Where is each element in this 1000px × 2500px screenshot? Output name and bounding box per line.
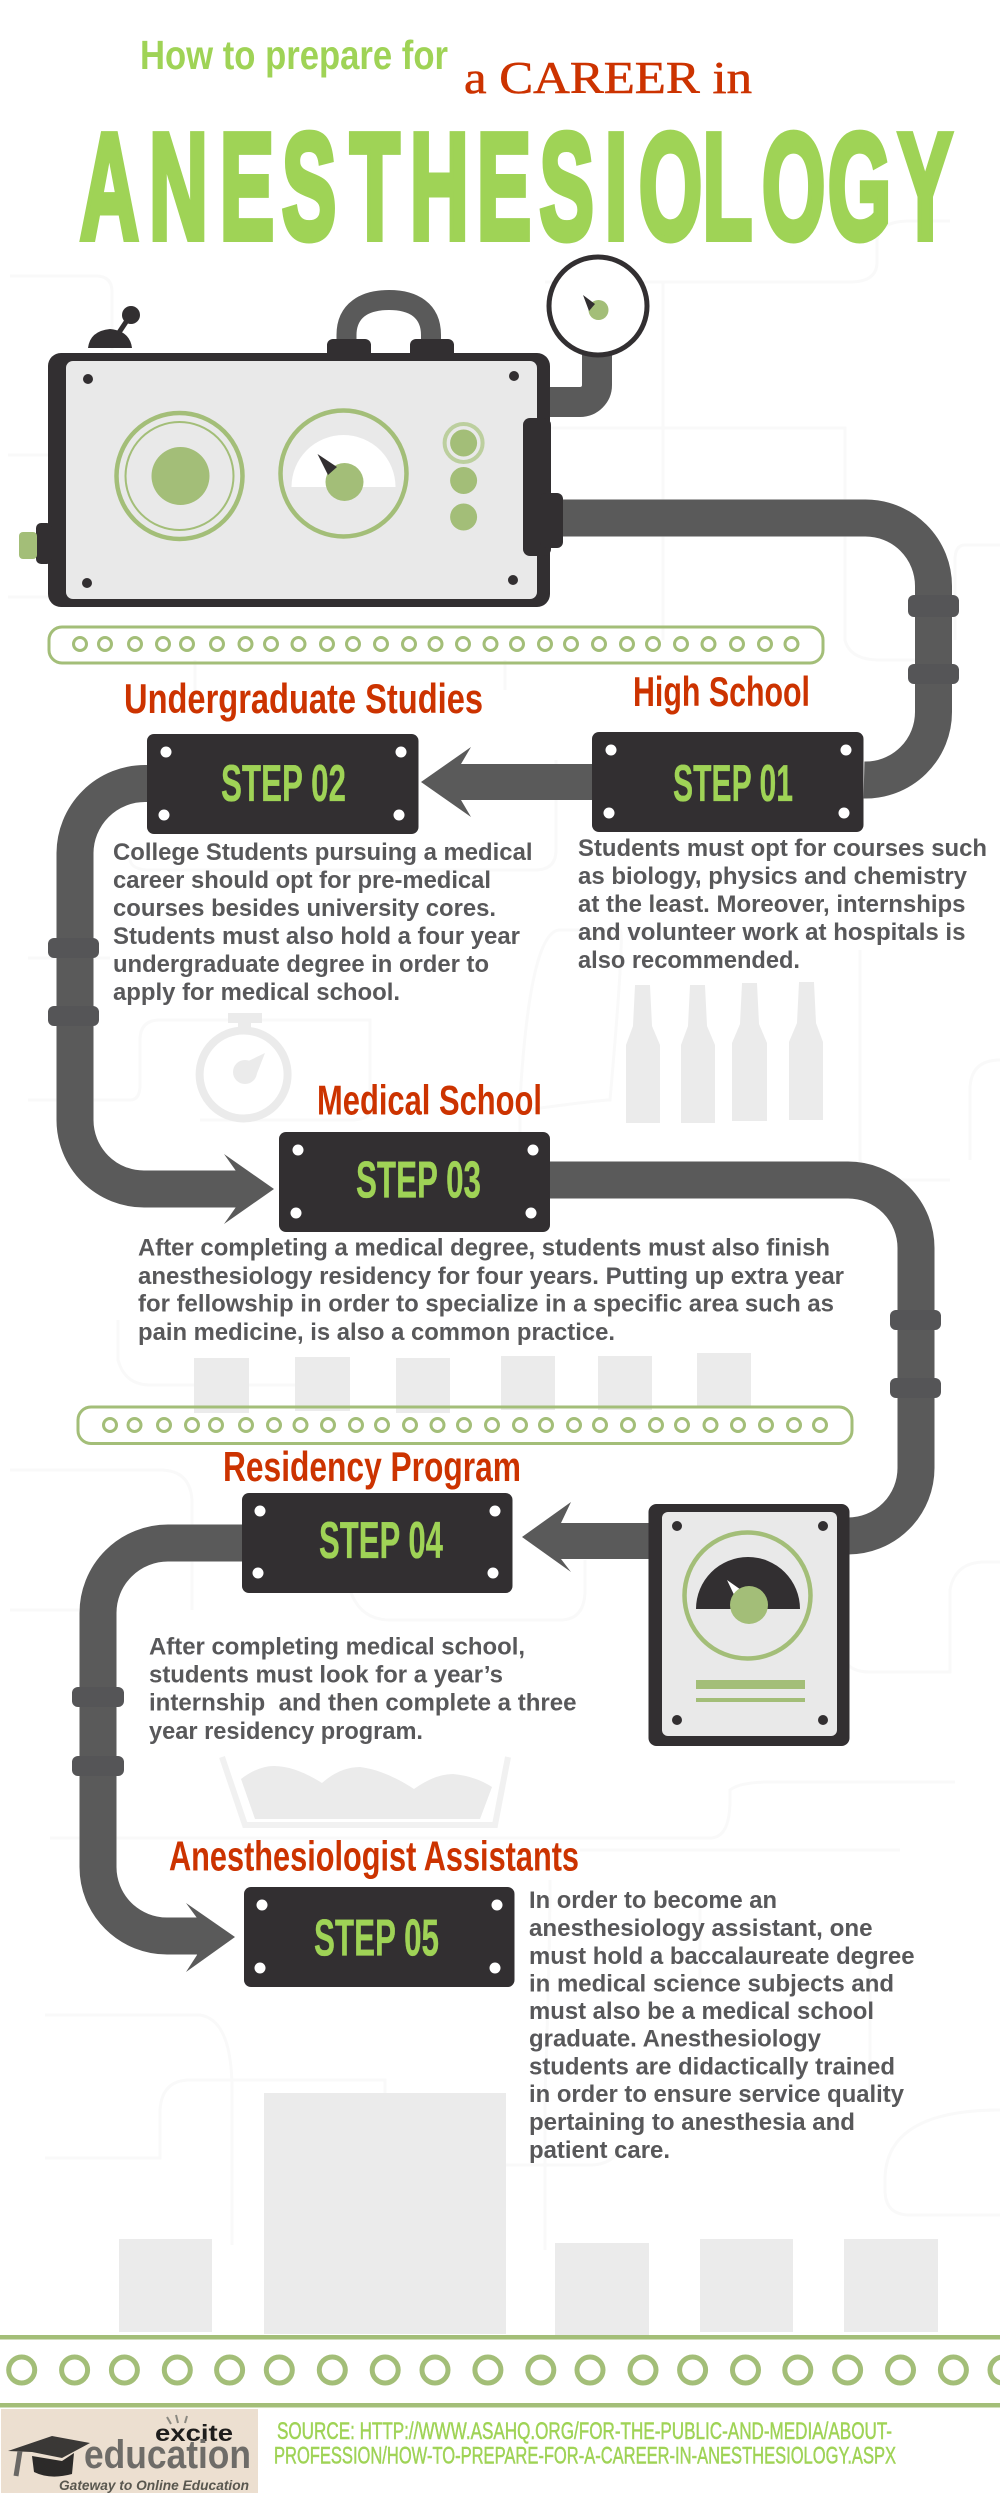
title line: a career in: a CAREER in <box>464 52 752 103</box>
plate: step 05 <box>244 1887 514 1987</box>
pipe: machine to step 01 <box>550 518 959 780</box>
text: step 05 description <box>529 1887 914 2164</box>
text: step 04 description: internship and then complete a three <box>149 1690 576 1716</box>
plate: step 03: STEP 03 <box>356 1152 481 1210</box>
step 04 group <box>149 1443 576 1745</box>
logo word: education: education <box>84 2433 251 2477</box>
machine panel <box>66 361 537 599</box>
machine <box>19 257 647 607</box>
machine screws <box>82 371 519 588</box>
plate: step 01 <box>592 732 864 832</box>
machine lever <box>88 306 140 348</box>
heading: residency program: Residency Program <box>223 1443 521 1490</box>
text: step 02 description: career should opt for pre-medical <box>113 867 491 894</box>
text: step 01 description: Students must opt for courses such <box>578 835 987 862</box>
text: step 02 description: College Students pursuing a medical <box>113 839 532 866</box>
center dial <box>280 410 406 536</box>
background icon: stopwatch <box>200 1013 288 1118</box>
text: step 01 description: as biology, physics and chemistry <box>578 863 968 890</box>
text: step 02 description <box>113 839 532 1006</box>
plate: step 04: STEP 04 <box>319 1512 443 1570</box>
text: step 05 description: graduate. Anesthesiology <box>529 2026 822 2052</box>
arrow: gauge to step 04 <box>522 1502 650 1572</box>
text: step 05 description: must also be a medical school <box>529 1998 874 2025</box>
bottom conveyor <box>0 2335 1000 2408</box>
conveyor belt 2 <box>78 1407 852 1444</box>
heading: medical school: Medical School <box>317 1076 542 1124</box>
text: step 05 description: anesthesiology assistant, one <box>529 1915 872 1942</box>
machine connectors <box>19 418 563 564</box>
gauge machine <box>648 1504 850 1746</box>
plate: step 02 <box>147 734 418 834</box>
text: step 05 description: patient care. <box>529 2137 670 2164</box>
step 05 group <box>169 1832 914 2164</box>
text: step 04 description: students must look for a year’s <box>149 1662 503 1688</box>
top gauge <box>545 257 647 402</box>
logo: excite education <box>1 2409 258 2493</box>
pipe: step 04 to step 05 <box>72 1543 244 1972</box>
plate: step 01: STEP 01 <box>673 755 793 813</box>
background bars <box>119 2093 938 2336</box>
heading: high school: High School <box>633 668 810 715</box>
step 01 group <box>578 668 987 974</box>
plate: step 03 <box>279 1132 550 1232</box>
text: step 01 description: also recommended. <box>578 947 800 974</box>
text: step 01 description <box>578 835 987 974</box>
background icon: bucket <box>222 1757 508 1825</box>
heading: anesthesiologist assistants: Anesthesiologist Assistants <box>169 1832 579 1880</box>
text: step 04 description: year residency program. <box>149 1718 423 1745</box>
text: step 01 description: and volunteer work at hospitals is <box>578 919 966 946</box>
source text <box>274 2418 896 2470</box>
left dial <box>116 413 242 539</box>
text: step 02 description: Students must also hold a four year <box>113 923 520 950</box>
indicator lights <box>445 424 483 530</box>
pipe: step 03 to gauge <box>548 1180 941 1536</box>
background icon: bottles <box>626 982 823 1123</box>
title <box>80 32 952 271</box>
text: step 03 description: anesthesiology residency for four years. Putting up extra year <box>138 1263 844 1290</box>
text: step 05 description: must hold a baccalaureate degree <box>529 1943 914 1970</box>
arrow: step 01 to step 02 <box>421 747 594 817</box>
text: step 05 description: students are didactically trained <box>529 2054 895 2080</box>
plate: step 02: STEP 02 <box>221 755 346 813</box>
text: step 02 description: courses besides university cores. <box>113 895 496 922</box>
conveyor belt 1 <box>49 627 823 663</box>
machine body <box>48 353 550 607</box>
title line: how to prepare for: How to prepare for <box>140 32 448 78</box>
text: step 02 description: undergraduate degree in order to <box>113 951 489 978</box>
pipe: step 02 to step 03 <box>48 784 274 1224</box>
text: step 03 description: After completing a medical degree, students must also finish <box>138 1234 830 1262</box>
machine handle <box>327 300 454 359</box>
text: step 04 description: After completing medical school, <box>149 1634 525 1660</box>
text: step 02 description: apply for medical school. <box>113 979 400 1006</box>
heading: undergraduate studies: Undergraduate Studies <box>124 675 483 722</box>
text: step 05 description: pertaining to anesthesia and <box>529 2109 855 2136</box>
plate: step 04 <box>242 1493 512 1593</box>
text: step 05 description: In order to become an <box>529 1887 777 1914</box>
logo word: excite: excite <box>155 2420 233 2446</box>
text: step 01 description: at the least. Moreover, internships <box>578 891 966 918</box>
text: step 05 description: in medical science subjects and <box>529 1970 894 1998</box>
step 02 group <box>113 675 532 1006</box>
icon: graduation cap <box>8 2436 90 2477</box>
step 03 group <box>138 1076 844 1346</box>
title word: anesthesiology: ANESTHESIOLOGY <box>80 102 952 271</box>
icon: excite sparks <box>167 2415 187 2424</box>
text: step 04 description <box>149 1634 576 1745</box>
text: step 03 description: pain medicine, is also a common practice. <box>138 1319 615 1346</box>
text: step 05 description: in order to ensure service quality <box>529 2081 905 2108</box>
plate: step 05: STEP 05 <box>314 1910 439 1968</box>
text: step 03 description: for fellowship in order to specialize in a specific area such as <box>138 1290 834 1318</box>
background boxes above conveyor <box>194 1353 751 1413</box>
text: step 03 description <box>138 1234 844 1346</box>
logo tagline: Gateway to Online Education <box>59 2477 249 2493</box>
